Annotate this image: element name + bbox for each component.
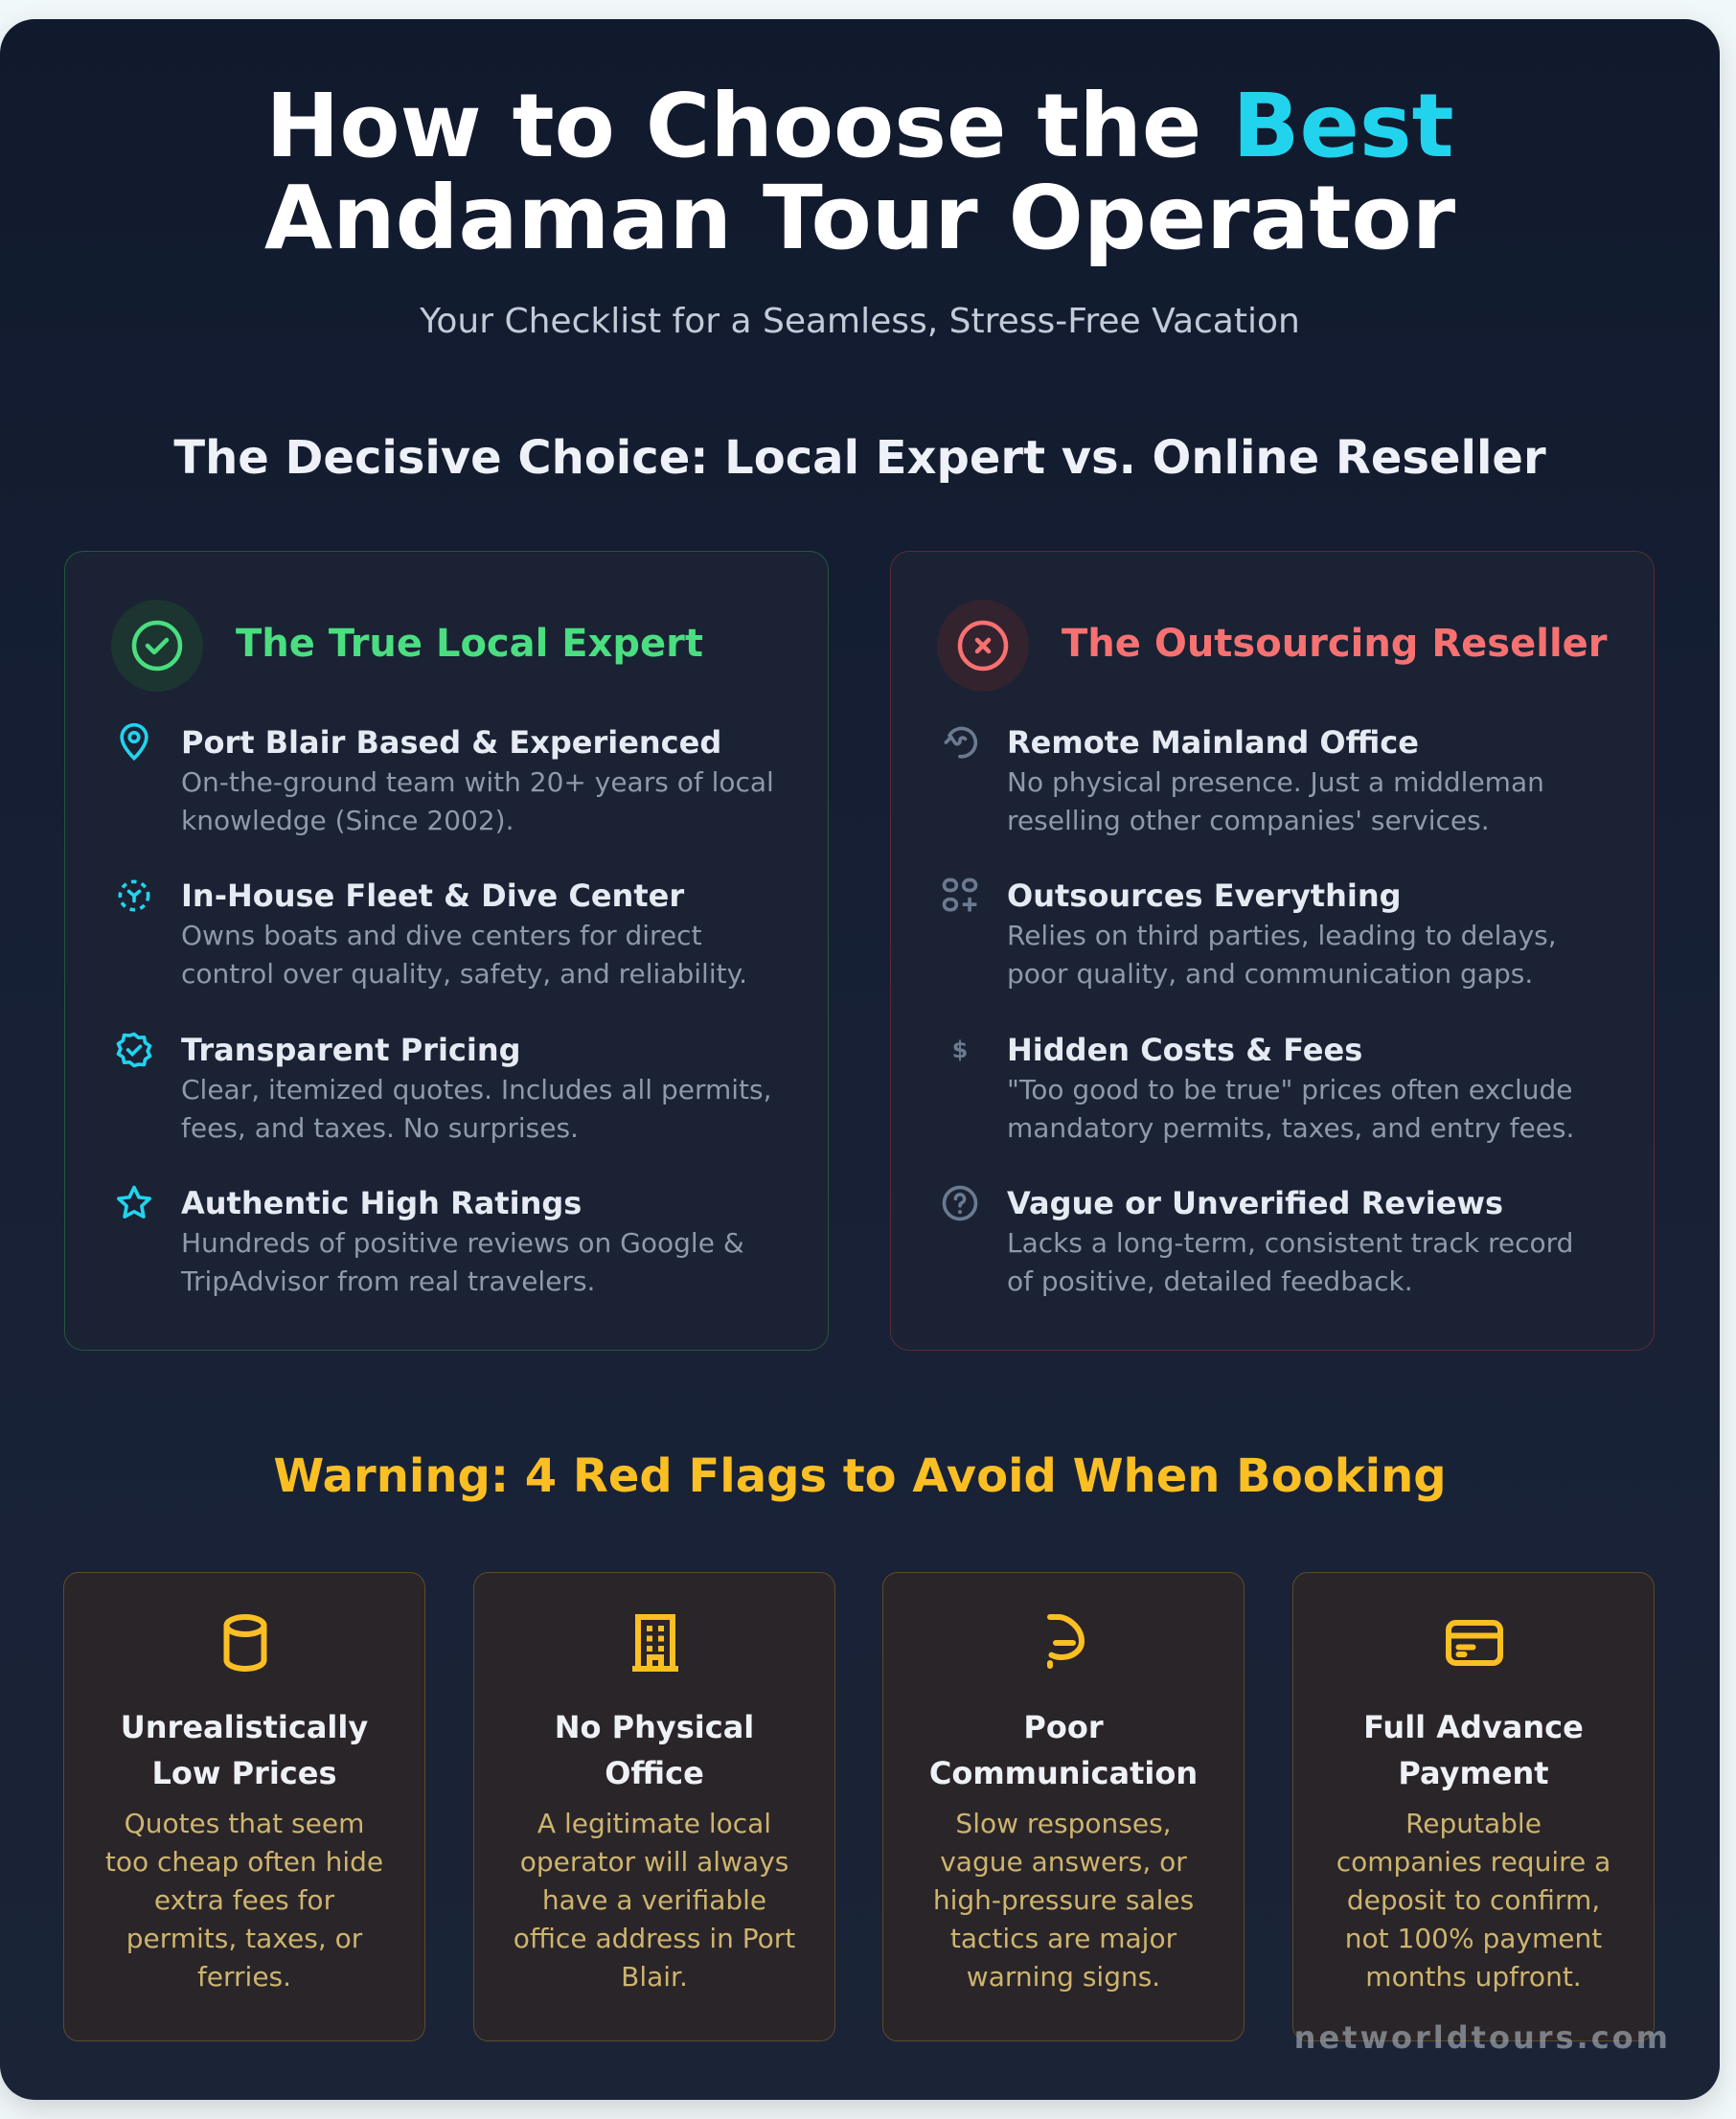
item: transparent pricing: Clear, itemized quotes. Includes all permits, fees, and taxes. No surprises. — [181, 1074, 771, 1144]
section heading: red flags: Warning: 4 Red Flags to Avoid When Booking — [273, 1449, 1447, 1503]
item: high ratings: Hundreds of positive reviews on Google & TripAdvisor from real travelers. — [181, 1227, 744, 1297]
flag card: no office — [473, 1572, 835, 2041]
flag card: low prices: Unrealistically — [121, 1709, 368, 1745]
watermark: networldtours.com — [1294, 2019, 1671, 2056]
flag card: full advance payment: Reputable companies require a deposit to confirm, not 100% payment months upfront. — [1336, 1808, 1610, 1993]
flag card: no office: A legitimate local operator will always have a verifiable office address in Port Blair. — [514, 1808, 795, 1993]
item: hidden costs: $ — [952, 1037, 968, 1063]
panel heading: The Outsourcing Reseller — [1062, 622, 1608, 666]
item: high ratings — [117, 1185, 744, 1297]
panel: true local expert — [64, 551, 829, 1351]
flag card: poor communication: Poor — [1023, 1709, 1104, 1745]
flag card: no office: No Physical — [555, 1709, 754, 1745]
item: port blair based: On-the-ground team with 20+ years of local knowledge (Since 2002). — [181, 766, 774, 836]
subtitle: Your Checklist for a Seamless, Stress-Free Vacation — [420, 302, 1300, 341]
item: transparent pricing: Transparent Pricing — [181, 1032, 521, 1068]
flag card: poor communication: Slow responses, vague answers, or high-pressure sales tactics are major warning signs. — [933, 1808, 1194, 1993]
item: vague reviews — [943, 1185, 1573, 1297]
item: outsources everything: Relies on third parties, leading to delays, poor quality, and communication gaps. — [1007, 920, 1557, 990]
panel heading: The True Local Expert — [236, 622, 703, 666]
flag card: low prices: Quotes that seem too cheap often hide extra fees for permits, taxes, or ferries. — [105, 1808, 383, 1993]
title — [264, 75, 1455, 269]
item: hidden costs: Hidden Costs & Fees — [1007, 1032, 1362, 1068]
item: outsources everything — [943, 877, 1557, 990]
item: port blair based — [120, 722, 774, 836]
title: Andaman Tour Operator — [264, 167, 1455, 269]
item: vague reviews: Vague or Unverified Reviews — [1007, 1185, 1503, 1221]
icon: speech — [1047, 1614, 1085, 1669]
flag card: low prices: Low Prices — [151, 1755, 337, 1791]
flag card: poor communication — [882, 1572, 1245, 2041]
item: remote office: Remote Mainland Office — [1007, 724, 1419, 761]
item: outsources everything: Outsources Everything — [1007, 877, 1402, 914]
icon: building — [632, 1614, 678, 1672]
item: in-house fleet: Owns boats and dive centers for direct control over quality, safety, and reliability. — [181, 920, 747, 990]
item: in-house fleet: In-House Fleet & Dive Center — [181, 877, 684, 914]
icon: credit card — [1446, 1620, 1503, 1666]
item: high ratings: Authentic High Ratings — [181, 1185, 582, 1221]
icon: red x circle — [937, 600, 1029, 692]
panel: outsourcing reseller — [890, 551, 1655, 1351]
item: hidden costs: "Too good to be true" prices often exclude mandatory permits, taxes, and entry fees. — [1007, 1074, 1574, 1144]
item: port blair based: Port Blair Based & Experienced — [181, 724, 721, 761]
icon: green check circle — [111, 600, 203, 692]
icon: coin stack — [224, 1614, 266, 1672]
flag card: full advance payment: Full Advance — [1363, 1709, 1584, 1745]
section heading: comparison: The Decisive Choice: Local Expert vs. Online Reseller — [173, 431, 1546, 485]
item: vague reviews: Lacks a long-term, consistent track record of positive, detailed feedback. — [1007, 1227, 1573, 1297]
flag card: poor communication: Communication — [929, 1755, 1198, 1791]
item: transparent pricing — [117, 1032, 771, 1144]
title: How to Choose the Best — [265, 75, 1454, 177]
item: remote office: No physical presence. Just a middleman reselling other companies' services. — [1007, 766, 1544, 836]
flag card: low prices — [63, 1572, 425, 2041]
flag card: no office: Office — [605, 1755, 704, 1791]
item: remote office — [944, 724, 1544, 836]
item: in-house fleet — [119, 877, 747, 990]
flag card: full advance payment: Payment — [1398, 1755, 1549, 1791]
flag card: full advance payment — [1292, 1572, 1655, 2041]
item: hidden costs — [952, 1032, 1574, 1144]
